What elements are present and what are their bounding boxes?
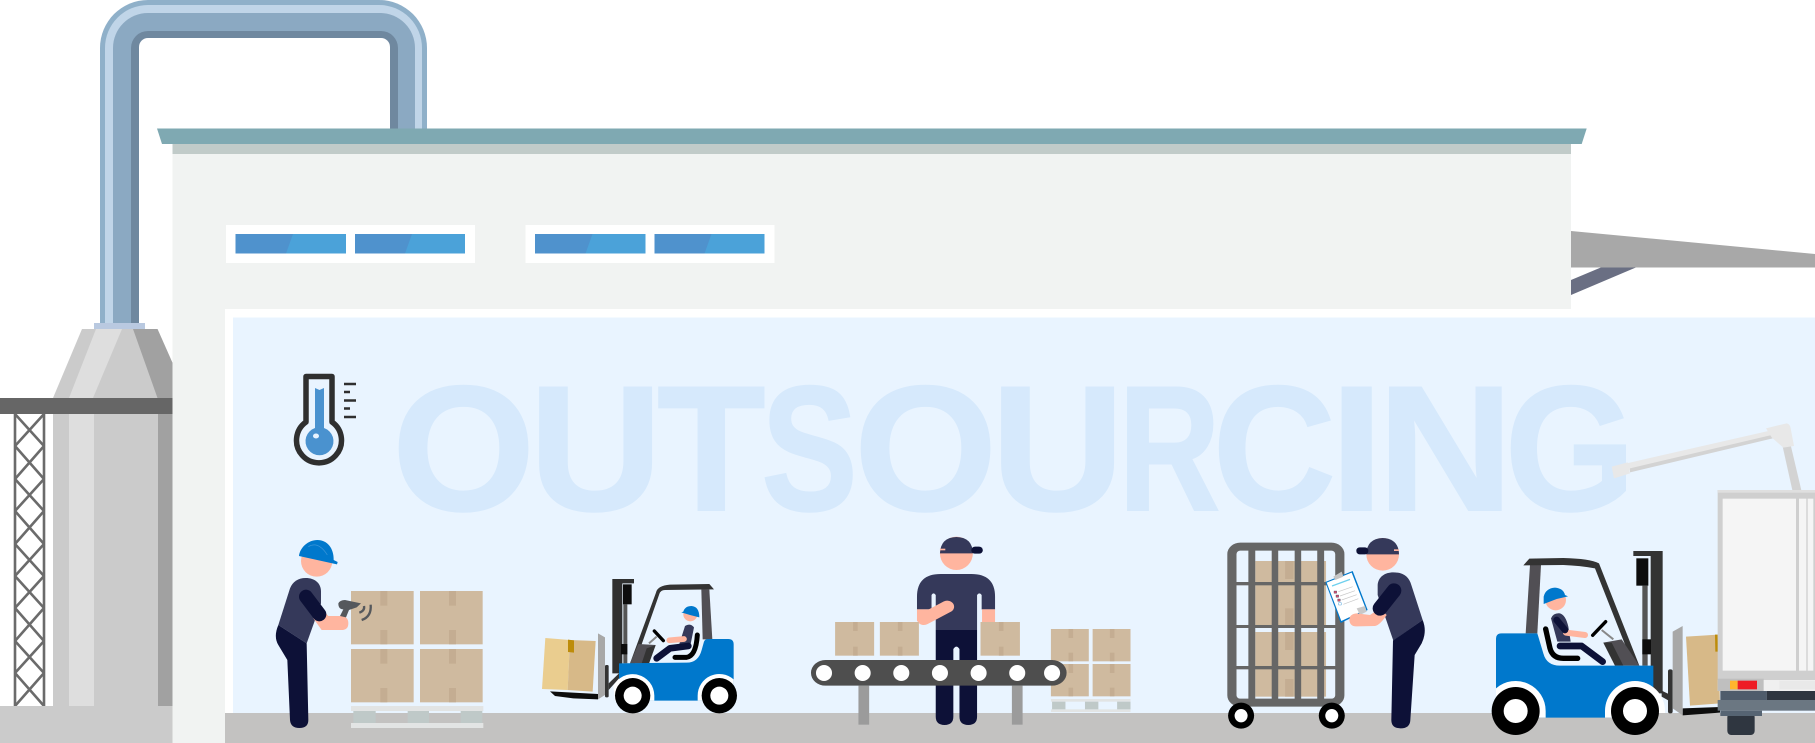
- worker at conveyor: [917, 537, 995, 725]
- forklift left: [542, 579, 737, 713]
- title watermark: T: [657, 349, 765, 548]
- dust collector silo: [0, 323, 173, 707]
- loading bay opening: [225, 309, 1815, 743]
- left ground: [0, 706, 173, 743]
- roll cage with boxes: [1228, 547, 1345, 729]
- title watermark: U: [529, 349, 662, 548]
- title watermark: C: [1213, 349, 1336, 548]
- worker with clipboard: [1325, 538, 1425, 728]
- conveyor belt with boxes: [811, 622, 1067, 725]
- awning: [1571, 231, 1815, 295]
- title watermark: O: [854, 349, 997, 548]
- duct pipe: [100, 0, 427, 323]
- lattice tower: [15, 414, 44, 706]
- title watermark: S: [761, 349, 858, 548]
- window right: [526, 225, 774, 263]
- window left: [226, 225, 475, 263]
- title watermark: U: [991, 349, 1124, 548]
- worker with scanner: [276, 540, 371, 728]
- title watermark: N: [1378, 349, 1513, 548]
- pallet of boxes: [351, 591, 483, 728]
- truck: [1718, 490, 1815, 735]
- title watermark: R: [1118, 349, 1220, 548]
- building: [157, 128, 1587, 743]
- forklift right: [1492, 551, 1720, 735]
- title watermark: O: [392, 349, 535, 548]
- icon: thermometer: [296, 376, 356, 463]
- pallet of boxes behind conveyor: [1051, 629, 1131, 712]
- title watermark: I: [1330, 349, 1384, 548]
- title watermark: G: [1505, 349, 1636, 548]
- boom arm: [1612, 423, 1802, 492]
